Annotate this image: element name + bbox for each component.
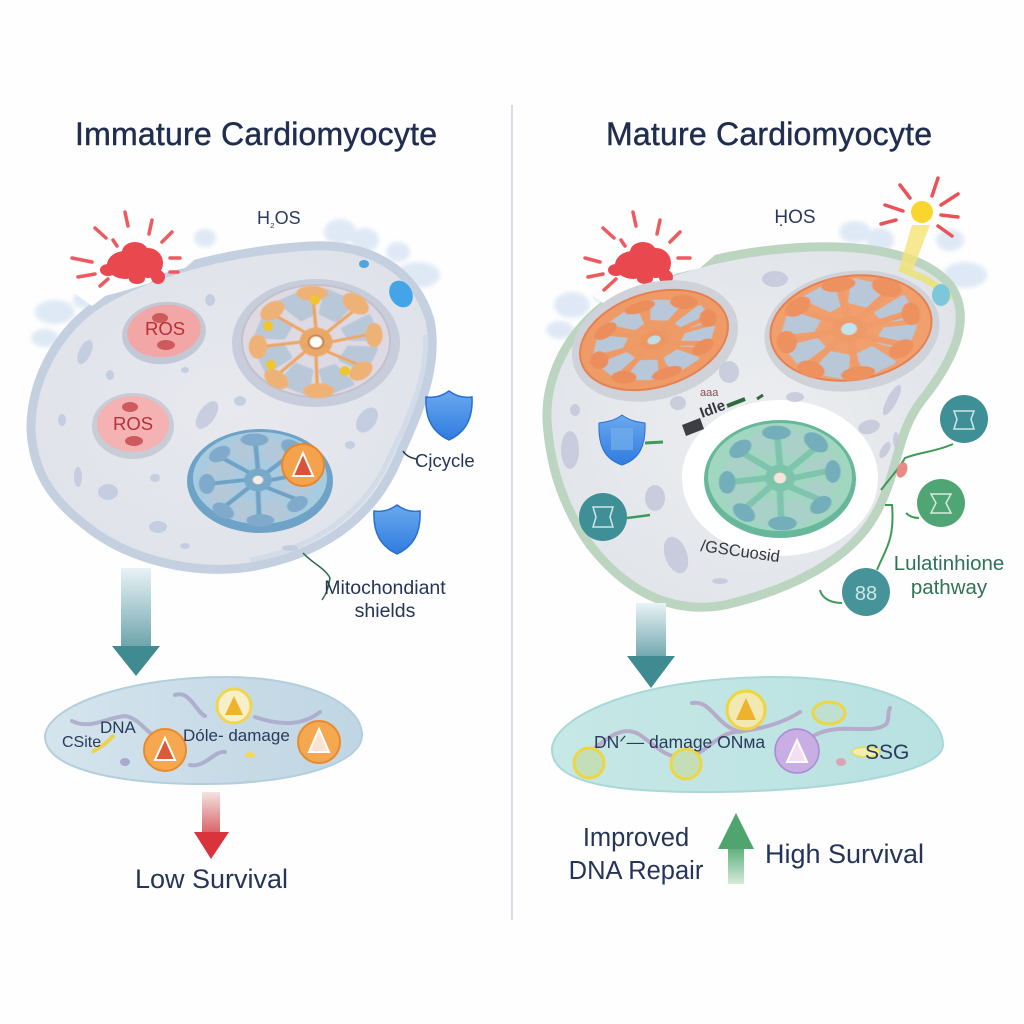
icon: yellow burst on membrane — [881, 178, 958, 306]
blue-white splash clouds — [31, 219, 440, 347]
icon: shield upper — [426, 391, 472, 440]
title: immature: Immature Cardiomyocyte — [75, 116, 437, 152]
title: mature: Mature Cardiomyocyte — [606, 116, 932, 152]
marker yellow top right — [813, 702, 845, 724]
icon: enzyme badge middle right — [906, 479, 965, 527]
label: mitochondrial shields — [303, 553, 446, 622]
label: cycle: Cįcycle — [415, 450, 475, 471]
arrow: down red — [194, 792, 229, 859]
label: glutathione pathway: Lulatinhione — [894, 552, 1004, 575]
white tear over cell top-left — [585, 250, 715, 306]
label: mitochondrial shields: shields — [355, 600, 416, 622]
panel divider — [511, 105, 513, 920]
mitochondrion: grey with orange spokes — [232, 279, 400, 407]
label: high survival: High Survival — [765, 839, 924, 869]
garbled text inside cell lower: /GSCuosid — [699, 537, 781, 566]
blue-white splash clouds — [546, 221, 987, 339]
marker yellow left — [574, 748, 604, 778]
panel: DNA repair dish — [552, 677, 943, 792]
mitochondrion: blue with warning badge — [187, 429, 333, 533]
cytoplasm granules — [561, 271, 904, 584]
dish labels: DNA — [100, 718, 137, 737]
label: improved DNA repair: DNA Repair — [569, 857, 704, 885]
label: H2O2: OS — [275, 208, 301, 228]
garbled text inside cell upper: aaa — [700, 387, 719, 399]
white tear over cell top-left — [70, 250, 200, 306]
icon: shield lower — [374, 505, 420, 554]
panel: DNA damage dish: Dóle- damage — [183, 726, 290, 745]
DNA strands — [72, 694, 320, 765]
icon: ROS burst — [585, 212, 690, 290]
panel: mature cardiomyocyte — [546, 116, 1004, 885]
label: glutathione pathway: pathway — [911, 576, 988, 599]
organelle: ROS vesicle top — [118, 296, 210, 370]
icon: enzyme badge bottom with connector — [820, 505, 893, 616]
label: glutathione pathway — [894, 552, 1004, 599]
icon: enzyme badge upper right — [881, 395, 988, 490]
arrow: down teal — [112, 568, 160, 676]
label: low survival: Low Survival — [135, 864, 288, 894]
garbled text inside cell upper: Idle — [698, 397, 728, 422]
label: H2O2: ₂ — [270, 216, 275, 230]
cytoplasm granules — [58, 294, 382, 551]
marker purple flask — [775, 729, 819, 773]
arrow: up green — [718, 813, 754, 884]
arrow: down teal — [627, 603, 675, 688]
panel: DNA repair dish: SSG — [865, 741, 909, 764]
DNA strand — [590, 703, 890, 758]
panel: DNA damage dish: CSite — [62, 734, 101, 751]
icon: enzyme badge left — [579, 493, 650, 541]
icon: warning flask badge — [282, 444, 324, 486]
label: mitochondrial shields: Mitochondiant — [324, 577, 446, 599]
marker yellow top flask — [727, 691, 765, 729]
flask marker left — [144, 729, 186, 771]
cell body — [31, 246, 432, 569]
garbled text inside cell upper — [682, 387, 763, 436]
icon: blue membrane droplet — [359, 260, 418, 312]
flask marker right — [298, 721, 340, 763]
label: H2O2: H — [257, 208, 270, 228]
icon: enzyme badge bottom with connector: 88 — [855, 583, 877, 605]
icon: blue shield in cell — [599, 415, 663, 465]
organelle: ROS vesicle bottom — [92, 393, 174, 459]
organelle: ROS vesicle bottom: ROS — [113, 413, 153, 434]
cell body — [547, 247, 960, 607]
label: improved DNA repair: Improved — [583, 824, 689, 852]
mitochondrion: green with white halo — [682, 400, 878, 556]
mitochondrion: orange right — [757, 259, 947, 403]
label: improved DNA repair — [569, 824, 704, 885]
label: HOS: ḤOS — [774, 207, 816, 228]
panel: DNA damage dish — [45, 677, 362, 784]
flask marker top — [217, 689, 251, 723]
dish labels: DNᐟ— damage ONᴍa — [594, 732, 765, 752]
marker yellow centre — [671, 749, 701, 779]
panel: immature cardiomyocyte — [31, 116, 475, 894]
organelle: ROS vesicle top: ROS — [145, 318, 185, 339]
icon: ROS burst — [72, 212, 180, 286]
mitochondrion: orange left — [557, 261, 753, 421]
